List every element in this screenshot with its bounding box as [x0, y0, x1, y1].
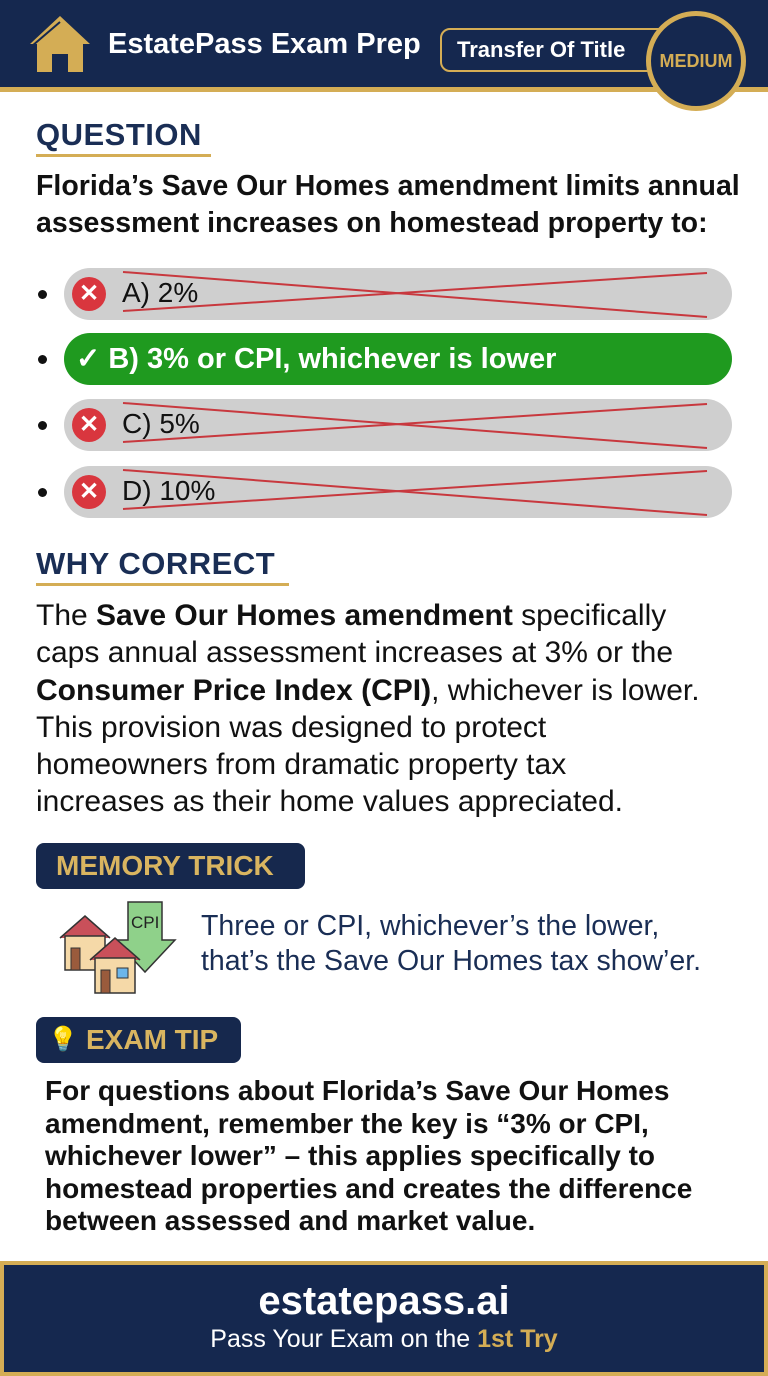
bullets — [38, 290, 47, 497]
difficulty badge — [646, 11, 746, 111]
option B — [64, 333, 732, 385]
exam tip text: amendment, remember the key is “3% or CPI, — [45, 1108, 649, 1138]
explanation text: The Save Our Homes amendment specifically — [36, 599, 666, 632]
memory trick text: that’s the Save Our Homes tax show’er. — [201, 945, 701, 977]
explanation text: homeowners from dramatic property tax — [36, 748, 566, 781]
difficulty badge: MEDIUM — [660, 51, 732, 71]
exam tip text: homestead properties and creates the difference — [45, 1172, 692, 1204]
footer — [0, 1261, 768, 1376]
option A: ✕ — [79, 280, 99, 307]
footer tagline: Pass Your Exam on the 1st Try — [210, 1325, 558, 1353]
icon: houses with CPI arrow: CPI — [131, 913, 159, 932]
option B: ✓ B) 3% or CPI, whichever is lower — [76, 343, 556, 375]
explanation text: This provision was designed to protect — [36, 711, 546, 744]
strike lines — [122, 271, 708, 516]
explanation text: Consumer Price Index (CPI), whichever is lower. — [36, 674, 700, 707]
option D — [64, 466, 732, 518]
badge: memory trick: MEMORY TRICK — [56, 850, 274, 881]
topic pill: Transfer Of Title — [457, 37, 625, 62]
badge: exam tip: EXAM TIP — [86, 1024, 218, 1055]
badge: exam tip: 💡 — [48, 1026, 78, 1053]
exam tip text: whichever lower” – this applies specifically to — [45, 1140, 655, 1171]
option C: ✕ — [79, 411, 99, 438]
explanation text — [36, 599, 700, 818]
option A — [64, 268, 732, 320]
option C — [64, 399, 732, 451]
question text — [36, 170, 740, 239]
exam tip text: between assessed and market value. — [45, 1205, 535, 1236]
icon: houses with CPI arrow — [60, 901, 177, 994]
icon: house — [30, 16, 90, 72]
option C: C) 5% — [122, 408, 200, 439]
heading: why correct: WHY CORRECT — [36, 546, 275, 581]
option A: A) 2% — [122, 277, 198, 308]
heading: question: QUESTION — [36, 117, 202, 152]
exam tip text: For questions about Florida’s Save Our Homes — [45, 1075, 669, 1106]
topic pill — [440, 28, 670, 72]
option D: ✕ — [79, 478, 99, 505]
option D: D) 10% — [122, 475, 215, 506]
brand title: EstatePass Exam Prep — [108, 28, 421, 60]
badge: memory trick — [36, 843, 305, 889]
footer brand: estatepass.ai — [258, 1279, 510, 1323]
explanation text: increases as their home values appreciated. — [36, 785, 623, 818]
memory trick text: Three or CPI, whichever’s the lower, — [201, 910, 659, 942]
question text: assessment increases on homestead property to: — [36, 207, 708, 239]
question text: Florida’s Save Our Homes amendment limits annual — [36, 170, 740, 202]
exam tip text — [44, 1075, 692, 1236]
badge: exam tip — [36, 1017, 241, 1063]
memory trick text — [201, 910, 701, 977]
explanation text: caps annual assessment increases at 3% or the — [36, 636, 673, 669]
header bar — [0, 0, 768, 92]
